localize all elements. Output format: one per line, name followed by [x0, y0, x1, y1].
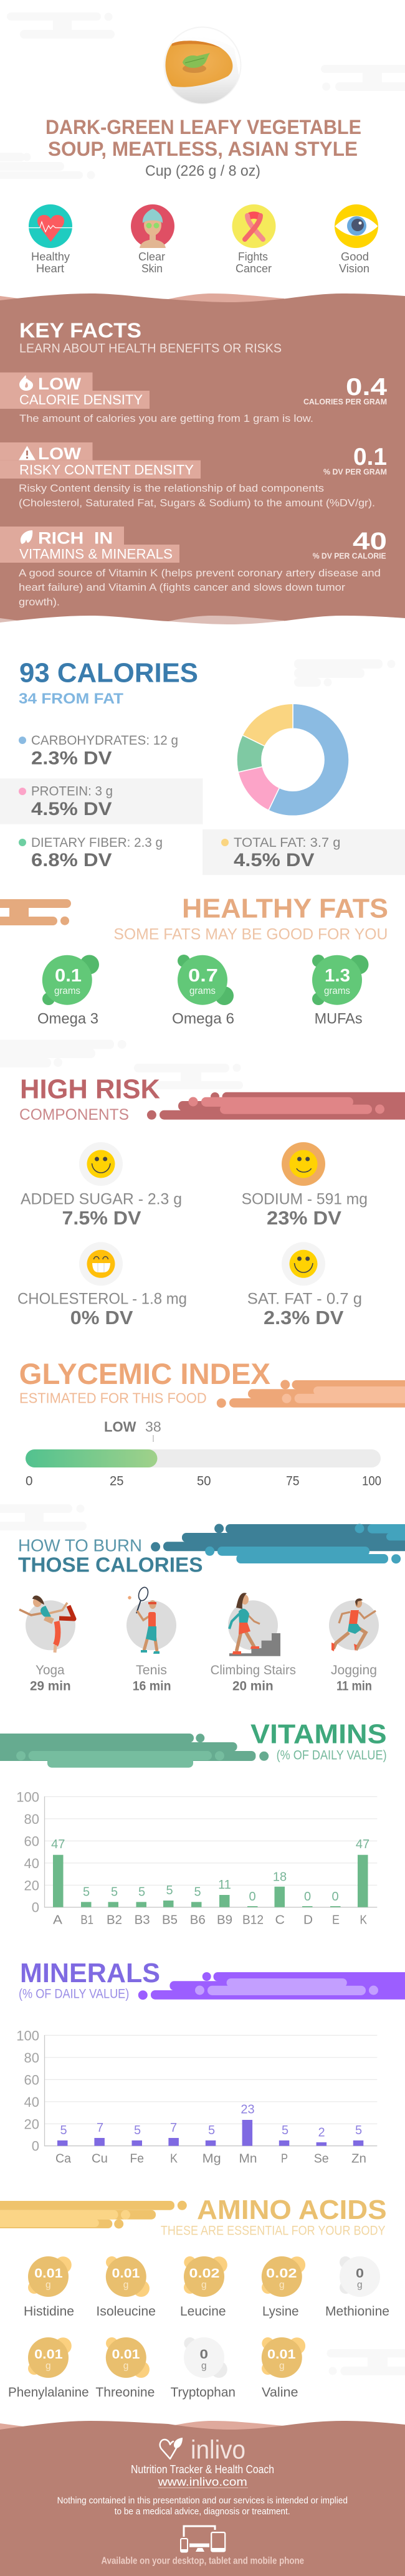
disclaimer — [57, 2496, 348, 2517]
bar chart: vitamins: 5 — [166, 1884, 173, 1897]
risk item: cholesterol: 0% DV — [70, 1307, 133, 1329]
macro: protein: 4.5% DV — [31, 799, 112, 819]
fact: risky content density — [0, 442, 387, 509]
bar chart: minerals: 40 — [24, 2094, 39, 2110]
amino: valine: Valine — [262, 2385, 298, 2400]
heading: minerals: MINERALS — [20, 1958, 160, 1988]
risk item: cholesterol — [17, 1242, 187, 1329]
fact: rich in vitamins and minerals — [0, 527, 387, 608]
bar chart: vitamins: 40 — [24, 1856, 39, 1871]
decoration: minerals bars — [138, 1972, 405, 2000]
icon: fights cancer ribbon: Fights — [238, 250, 268, 263]
gauge: glycemic index: 50 — [197, 1474, 211, 1488]
macro: carbohydrates: 2.3% DV — [31, 748, 112, 769]
subheading: LEARN ABOUT HEALTH BENEFITS OR RISKS — [19, 341, 282, 355]
amino: tryptophan: 0 — [199, 2347, 208, 2362]
amino: histidine: g — [45, 2280, 51, 2291]
heading: high risk: HIGH RISK — [20, 1074, 160, 1105]
risk item: added sugar: 7.5% DV — [62, 1207, 141, 1229]
heading: key facts: KEY FACTS — [19, 319, 141, 341]
amino: valine — [262, 2337, 305, 2400]
badge: omega 6: 0.7 — [188, 966, 218, 986]
icon: fights cancer ribbon — [232, 204, 275, 275]
title — [45, 116, 361, 160]
logo: inlivo: inlivo — [191, 2435, 245, 2464]
bar chart: vitamins: B1 — [80, 1912, 93, 1927]
heading: healthy fats: HEALTHY FATS — [182, 894, 388, 924]
bar chart: vitamins: 5 — [194, 1886, 201, 1899]
heading: glycemic index: GLYCEMIC INDEX — [19, 1357, 270, 1390]
fact: risky content density: % DV PER GRAM — [323, 467, 387, 477]
badge: omega 3: Omega 3 — [37, 1011, 98, 1028]
icon: healthy heart: Heart — [36, 262, 64, 275]
bar chart: minerals: 7 — [170, 2121, 177, 2135]
heading: those calories: THOSE CALORIES — [18, 1553, 203, 1576]
bar chart: minerals: 20 — [24, 2116, 39, 2132]
amino: methionine: 0 — [356, 2266, 364, 2281]
bar chart: vitamins: E — [332, 1912, 340, 1927]
subheading: components: COMPONENTS — [19, 1106, 129, 1123]
macro: total fat: TOTAL FAT: 3.7 g — [234, 835, 340, 850]
amino: valine: 0.01 — [267, 2347, 296, 2362]
badge: omega 6: Omega 6 — [172, 1011, 234, 1028]
bar chart: minerals — [16, 2028, 377, 2166]
bar chart: minerals: 60 — [24, 2072, 39, 2087]
badge: mufas: 1.3 — [325, 966, 350, 986]
fact: rich in vitamins and minerals: growth). — [19, 596, 60, 608]
fact: risky content density: RISKY CONTENT DENSITY — [19, 462, 194, 478]
bar chart: vitamins: 11 — [218, 1878, 231, 1892]
decoration: vitamins bars — [0, 1734, 269, 1768]
bar chart: minerals: Fe — [130, 2152, 144, 2166]
fact: calorie density: CALORIE DENSITY — [19, 392, 143, 408]
bar chart: minerals: Se — [314, 2152, 329, 2166]
amino: phenylalanine: Phenylalanine — [8, 2385, 89, 2400]
risk item: sodium — [242, 1142, 368, 1229]
amino: leucine: 0.02 — [189, 2266, 220, 2281]
bar chart: vitamins: B9 — [217, 1912, 232, 1927]
amino: lysine — [262, 2256, 305, 2319]
activity: tennis — [126, 1586, 176, 1694]
activity: climbing stairs — [211, 1593, 296, 1694]
bar chart: vitamins: 5 — [111, 1886, 118, 1899]
amino: leucine: g — [201, 2280, 207, 2291]
amino: threonine: 0.01 — [112, 2347, 140, 2362]
fact: risky content density: (Cholesterol, Saturated Fat, Sugars & Sodium) to the amount (%DV/gr). — [19, 497, 375, 509]
title: SOUP, MEATLESS, ASIAN STYLE — [48, 138, 358, 160]
icon: good vision eye: Good — [341, 250, 369, 263]
fact: rich in vitamins and minerals: % DV PER CALORIE — [313, 551, 386, 561]
gauge: glycemic index: 75 — [286, 1474, 299, 1488]
gauge: glycemic index: 25 — [110, 1474, 123, 1488]
amino: phenylalanine: g — [45, 2361, 51, 2372]
risk item: cholesterol: CHOLESTEROL - 1.8 mg — [17, 1290, 187, 1308]
badge: mufas: MUFAs — [315, 1011, 363, 1028]
bar chart: minerals: 5 — [282, 2124, 288, 2137]
bar chart: minerals: Cu — [92, 2152, 108, 2166]
icon: clear skin: Skin — [141, 262, 163, 275]
icon: good vision eye — [335, 204, 378, 275]
fact: calorie density: LOW — [38, 374, 82, 393]
badge: mufas: grams — [324, 986, 350, 996]
subheading: healthy fats: SOME FATS MAY BE GOOD FOR YOU — [113, 925, 388, 943]
badge: omega 3: grams — [54, 986, 80, 996]
tagline: Nutrition Tracker & Health Coach — [131, 2463, 274, 2476]
logo: inlivo — [160, 2435, 245, 2464]
macro: protein: PROTEIN: 3 g — [31, 784, 113, 799]
amino: isoleucine: g — [123, 2280, 128, 2291]
amino: methionine: Methionine — [325, 2304, 389, 2319]
bar chart: vitamins: 0 — [32, 1900, 39, 1915]
gauge: glycemic index: 100 — [362, 1474, 381, 1488]
amino: histidine: Histidine — [24, 2304, 74, 2319]
amino: methionine: g — [357, 2280, 363, 2291]
macro: dietary fiber — [19, 835, 163, 871]
amino: phenylalanine: 0.01 — [34, 2347, 63, 2362]
bar chart: vitamins: B5 — [162, 1912, 178, 1927]
bar chart: minerals: 5 — [355, 2124, 362, 2137]
amino: tryptophan: Tryptophan — [171, 2385, 236, 2400]
risk item: added sugar — [21, 1142, 182, 1229]
macro: dietary fiber: 6.8% DV — [31, 850, 112, 871]
bar chart: vitamins: 5 — [138, 1886, 145, 1899]
bar chart: minerals: K — [170, 2152, 178, 2166]
amino: isoleucine — [96, 2256, 156, 2319]
activity: tennis: 16 min — [133, 1679, 171, 1694]
bar chart: minerals: Ca — [55, 2152, 72, 2166]
amino: histidine — [24, 2256, 74, 2319]
risk item: sodium: 23% DV — [267, 1207, 341, 1229]
amino: methionine — [325, 2256, 389, 2319]
bar chart: minerals: 5 — [60, 2124, 67, 2137]
amino: valine: g — [279, 2361, 285, 2372]
amino: lysine: g — [279, 2280, 285, 2291]
amino: leucine: Leucine — [180, 2304, 226, 2319]
bar chart: vitamins: C — [275, 1912, 285, 1927]
bar chart: vitamins: B6 — [190, 1912, 206, 1927]
risk item: saturated fat: 2.3% DV — [264, 1307, 344, 1329]
heading: how to burn: HOW TO BURN — [18, 1535, 142, 1555]
activity: yoga — [19, 1595, 75, 1694]
fact: calorie density: 0.4 — [346, 374, 387, 401]
activity: yoga: 29 min — [30, 1679, 71, 1694]
bar chart: minerals: P — [281, 2152, 288, 2166]
title: DARK-GREEN LEAFY VEGETABLE — [45, 116, 361, 138]
activity: tennis: Tenis — [136, 1662, 167, 1677]
bar chart: minerals: 5 — [134, 2124, 141, 2137]
bar chart: vitamins: 5 — [83, 1886, 90, 1899]
amino: threonine: g — [123, 2361, 128, 2372]
bar chart: minerals: Mn — [239, 2152, 257, 2166]
risk item: sodium: SODIUM - 591 mg — [242, 1191, 368, 1208]
bar chart: minerals: 2 — [318, 2125, 325, 2139]
bar chart: vitamins: 20 — [24, 1877, 39, 1893]
amino: threonine: Threonine — [95, 2385, 155, 2400]
risk item: saturated fat: SAT. FAT - 0.7 g — [247, 1290, 362, 1308]
fact: rich in vitamins and minerals: RICH IN — [38, 529, 113, 548]
bar chart: vitamins: 47 — [356, 1838, 369, 1851]
macro: carbohydrates: CARBOHYDRATES: 12 g — [31, 733, 178, 748]
macro: dietary fiber: DIETARY FIBER: 2.3 g — [31, 835, 163, 850]
website link: www.inlivo.com — [158, 2475, 247, 2488]
fact: risky content density: LOW — [38, 444, 82, 463]
bar chart: vitamins: B2 — [107, 1912, 122, 1927]
bar chart: vitamins: A — [53, 1912, 62, 1927]
amino: lysine: Lysine — [262, 2304, 299, 2319]
amino: isoleucine: 0.01 — [112, 2266, 140, 2281]
bar chart: minerals: 100 — [16, 2028, 39, 2043]
bar chart: minerals: 5 — [208, 2124, 215, 2137]
gauge: glycemic index — [26, 1419, 381, 1488]
decoration: glycemic bars — [217, 1380, 405, 1408]
icon: healthy heart — [29, 204, 72, 275]
amino: threonine — [95, 2337, 155, 2400]
fact: risky content density: 0.1 — [353, 444, 387, 470]
fact: calorie density — [0, 373, 387, 424]
fact: rich in vitamins and minerals: heart failure) and Vitamin A (fights cancer and slows down tumor — [19, 581, 345, 593]
bar chart: vitamins: 100 — [16, 1789, 39, 1805]
panel: key facts — [0, 293, 405, 636]
bar chart: minerals: 0 — [32, 2139, 39, 2154]
panel: footer — [0, 2421, 405, 2576]
bar chart: vitamins: 0 — [249, 1890, 256, 1904]
serving size: Cup (226 g / 8 oz) — [145, 163, 260, 179]
fact: rich in vitamins and minerals: 40 — [353, 528, 387, 555]
bar chart: minerals: 80 — [24, 2050, 39, 2066]
macro: total fat — [202, 829, 405, 875]
amino: lysine: 0.02 — [266, 2266, 297, 2281]
fact: rich in vitamins and minerals: VITAMINS & MINERALS — [19, 546, 173, 562]
amino: phenylalanine — [8, 2337, 89, 2400]
macro: total fat: 4.5% DV — [234, 850, 314, 871]
activity: jogging: Jogging — [331, 1662, 377, 1677]
macro: protein — [0, 778, 203, 824]
risk item: added sugar: ADDED SUGAR - 2.3 g — [21, 1191, 182, 1208]
food photo: bowl of soup — [161, 27, 244, 106]
gauge: glycemic index: 0 — [26, 1474, 32, 1488]
bar chart: vitamins: B3 — [135, 1912, 150, 1927]
activity: climbing stairs: Climbing Stairs — [211, 1662, 296, 1677]
bar chart: vitamins: 18 — [273, 1870, 287, 1884]
icon: devices — [181, 2526, 225, 2552]
bar chart: vitamins: D — [303, 1912, 313, 1927]
bar chart: vitamins: 60 — [24, 1833, 39, 1849]
subheading: from fat: 34 FROM FAT — [19, 690, 123, 707]
activity: jogging: 11 min — [336, 1679, 372, 1694]
fact: rich in vitamins and minerals: A good source of Vitamin K (helps prevent coronary artery disease and — [19, 567, 381, 579]
amino: tryptophan: g — [201, 2361, 207, 2372]
disclaimer: to be a medical advice, diagnosis or treatment. — [115, 2506, 290, 2517]
icon: good vision eye: Vision — [339, 262, 369, 275]
activity: yoga: Yoga — [36, 1662, 65, 1677]
bar chart: vitamins: B12 — [242, 1912, 264, 1927]
activity: climbing stairs: 20 min — [232, 1679, 274, 1694]
macro: carbohydrates — [19, 733, 178, 769]
gauge: glycemic index: 38 — [145, 1419, 161, 1435]
amino: leucine — [180, 2256, 227, 2319]
bar chart: vitamins: 0 — [331, 1890, 339, 1904]
gauge: glycemic index: LOW — [104, 1419, 136, 1435]
badge: mufas — [312, 955, 369, 1028]
bar chart: minerals: Mg — [202, 2152, 221, 2166]
icon: fights cancer ribbon: Cancer — [236, 262, 272, 275]
bar chart: vitamins — [16, 1789, 377, 1927]
subheading: minerals: (% OF DAILY VALUE) — [19, 1987, 129, 2001]
donut chart: macronutrients — [237, 704, 349, 816]
availability note: Available on your desktop, tablet and mobile phone — [101, 2555, 304, 2566]
heading: 93 calories: 93 CALORIES — [19, 657, 198, 688]
amino: isoleucine: Isoleucine — [96, 2304, 156, 2319]
bar chart: minerals: 23 — [241, 2103, 255, 2117]
bar chart: minerals: 7 — [97, 2121, 103, 2135]
fact: calorie density: The amount of calories you are getting from 1 gram is low. — [19, 413, 313, 424]
amino: tryptophan — [171, 2337, 236, 2400]
bar chart: vitamins: 47 — [51, 1838, 65, 1851]
badge: omega 6: grams — [189, 986, 216, 996]
bar chart: vitamins: 0 — [304, 1890, 311, 1904]
bar chart: vitamins: K — [360, 1912, 367, 1927]
amino: histidine: 0.01 — [34, 2266, 63, 2281]
bar chart: vitamins: 80 — [24, 1811, 39, 1827]
decoration: burn calories bars — [151, 1524, 405, 1563]
risk item: saturated fat — [247, 1242, 362, 1329]
heading: amino acids: AMINO ACIDS — [197, 2195, 387, 2225]
badge: omega 3 — [37, 955, 99, 1028]
badge: omega 6 — [172, 955, 234, 1028]
badge: omega 3: 0.1 — [55, 966, 82, 986]
disclaimer: Nothing contained in this presentation and our services is intended or implied — [57, 2496, 348, 2506]
activity: jogging — [329, 1598, 379, 1694]
subheading: vitamins: (% OF DAILY VALUE) — [277, 1748, 387, 1762]
decoration: amino acids bars — [0, 2201, 187, 2228]
decoration: healthy fats bars — [0, 899, 71, 925]
decoration: high risk bars — [147, 1092, 405, 1120]
icon: clear skin: Clear — [138, 250, 165, 263]
fact: risky content density: Risky Content density is the relationship of bad components — [19, 482, 324, 494]
fact: calorie density: CALORIES PER GRAM — [303, 397, 387, 406]
icon: clear skin — [131, 204, 174, 275]
subheading: estimated: ESTIMATED FOR THIS FOOD — [19, 1390, 207, 1406]
bar chart: minerals: Zn — [351, 2152, 366, 2166]
heading: vitamins: VITAMINS — [250, 1719, 387, 1750]
icon: healthy heart: Healthy — [31, 250, 70, 263]
